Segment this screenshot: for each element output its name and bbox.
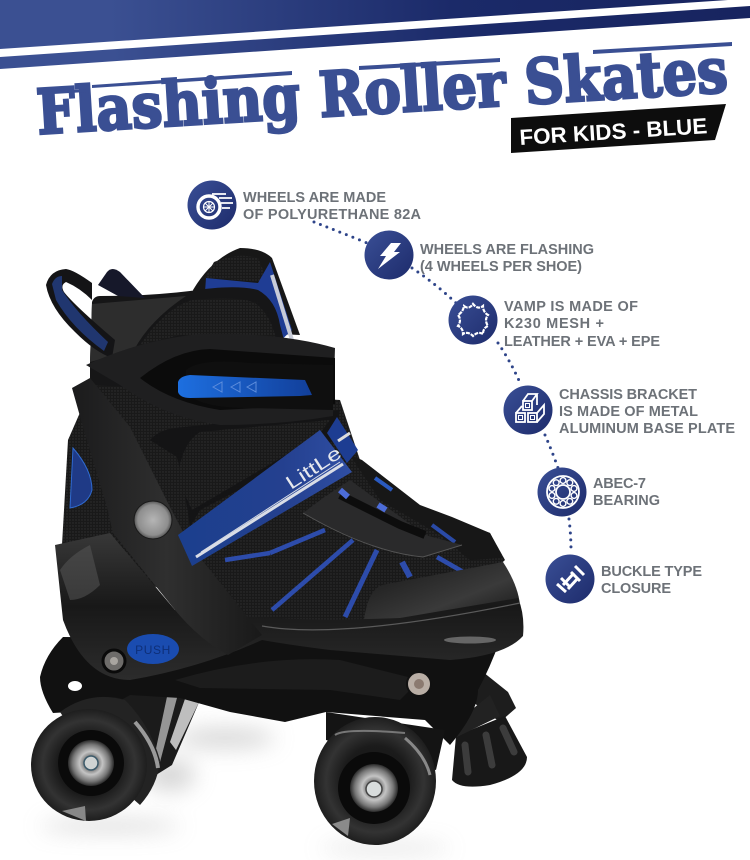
ground shadows — [40, 728, 450, 852]
callout: polyurethane wheels — [188, 180, 422, 230]
rear wheel — [31, 697, 160, 821]
carbon side plate — [72, 378, 262, 655]
buckle lever — [178, 375, 312, 398]
toe cap — [364, 562, 520, 625]
callout: polyurethane wheels: OF POLYURETHANE 82A — [243, 207, 422, 223]
sole — [55, 533, 523, 680]
icon: ball bearing — [547, 476, 579, 508]
icon: lightning bolt — [378, 243, 401, 269]
callout: bearing — [538, 468, 660, 516]
push button — [127, 634, 179, 664]
rear heel patch — [70, 448, 92, 508]
inner boot panel — [150, 410, 340, 527]
silver rivet — [134, 501, 172, 539]
callout: vamp materials — [448, 296, 660, 350]
icon: leather hide — [458, 304, 488, 336]
subtitle badge — [511, 104, 726, 153]
rear axle cylinder — [73, 688, 200, 785]
push button: PUSH — [135, 643, 171, 657]
icon: buckle chain — [557, 566, 584, 592]
dotted connectors — [314, 222, 571, 551]
callout: bearing: BEARING — [593, 493, 660, 509]
callout: flashing wheels: (4 WHEELS PER SHOE) — [420, 259, 582, 275]
shoe upper rear — [62, 385, 505, 620]
header band — [0, 0, 750, 69]
tongue and padding — [193, 248, 300, 345]
chassis — [40, 637, 500, 745]
callout: chassis bracket: IS MADE OF METAL — [559, 404, 698, 420]
callout: buckle closure: CLOSURE — [601, 581, 671, 597]
callout: buckle closure — [546, 554, 702, 604]
cuff strap — [86, 334, 335, 425]
callout: flashing wheels: WHEELS ARE FLASHING — [420, 242, 594, 258]
tongue lacing flap — [303, 480, 462, 557]
toe stop — [440, 668, 527, 787]
icon: metal beams — [516, 394, 544, 422]
callout: buckle closure: BUCKLE TYPE — [601, 564, 702, 580]
callout: chassis bracket: ALUMINUM BASE PLATE — [559, 421, 735, 437]
front wheel — [314, 712, 445, 845]
brand text: LittLe — [282, 443, 346, 494]
callout: vamp materials: VAMP IS MADE OF — [504, 299, 638, 315]
callout: vamp materials: LEATHER + EVA + EPE — [504, 334, 660, 350]
velcro strap — [178, 430, 352, 566]
callout: chassis bracket: CHASSIS BRACKET — [559, 387, 697, 403]
callout: flashing wheels — [364, 230, 594, 280]
chassis rivets — [103, 650, 431, 696]
ankle collar — [90, 287, 300, 400]
callout: vamp materials: K230 MESH + — [504, 316, 604, 332]
subtitle badge: FOR KIDS - BLUE — [519, 113, 708, 150]
callout: polyurethane wheels: WHEELS ARE MADE — [243, 190, 386, 206]
icon: wheel with speed lines — [198, 194, 233, 218]
distant lacing side — [350, 455, 503, 560]
rear strap piece — [327, 417, 358, 463]
heel bracket opening — [68, 681, 82, 691]
callout: chassis bracket — [504, 386, 735, 437]
callout: bearing: ABEC-7 — [593, 476, 646, 492]
blue mesh stripes — [225, 530, 465, 617]
roller skate photo illustration — [31, 248, 527, 852]
rear strap loops — [46, 269, 145, 358]
